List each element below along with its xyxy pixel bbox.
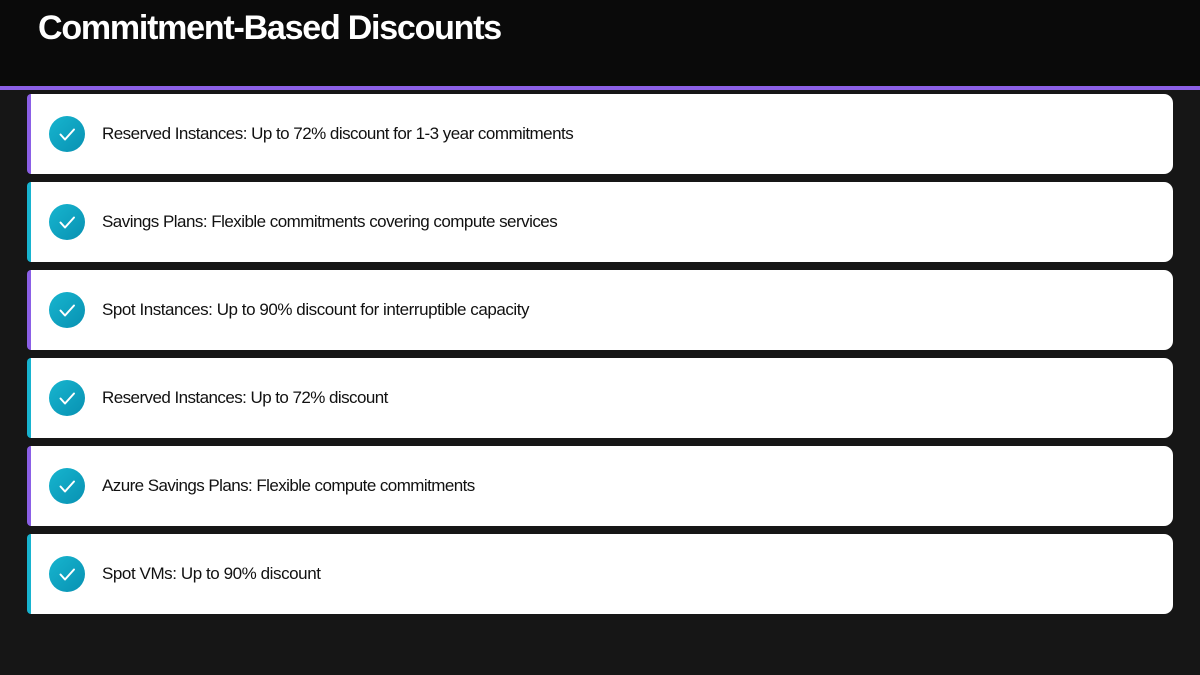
panel: Spot VMs <box>27 534 1173 614</box>
text: item 2: Savings Plans: Flexible commitments covering compute services <box>102 212 557 231</box>
panel: Reserved Instances 1-3 year <box>27 94 1173 174</box>
icon: check badge <box>49 204 85 240</box>
text: item 3: Spot Instances: Up to 90% discount for interruptible capacity <box>102 300 529 319</box>
text: item 6: Spot VMs: Up to 90% discount <box>102 564 321 583</box>
panel: Reserved Instances <box>27 358 1173 438</box>
icon: check badge <box>49 292 85 328</box>
icon: check badge <box>49 116 85 152</box>
header band <box>0 0 1200 90</box>
icon: check badge <box>49 380 85 416</box>
icon: check badge <box>49 468 85 504</box>
text: item 5: Azure Savings Plans: Flexible compute commitments <box>102 476 475 495</box>
panel: Savings Plans <box>27 182 1173 262</box>
icon: check badge <box>49 556 85 592</box>
text: item 1: Reserved Instances: Up to 72% discount for 1-3 year commitments <box>102 124 573 143</box>
panel: Azure Savings Plans <box>27 446 1173 526</box>
panel: Spot Instances <box>27 270 1173 350</box>
text: item 4: Reserved Instances: Up to 72% discount <box>102 388 388 407</box>
title: Commitment-Based Discounts <box>38 9 501 47</box>
